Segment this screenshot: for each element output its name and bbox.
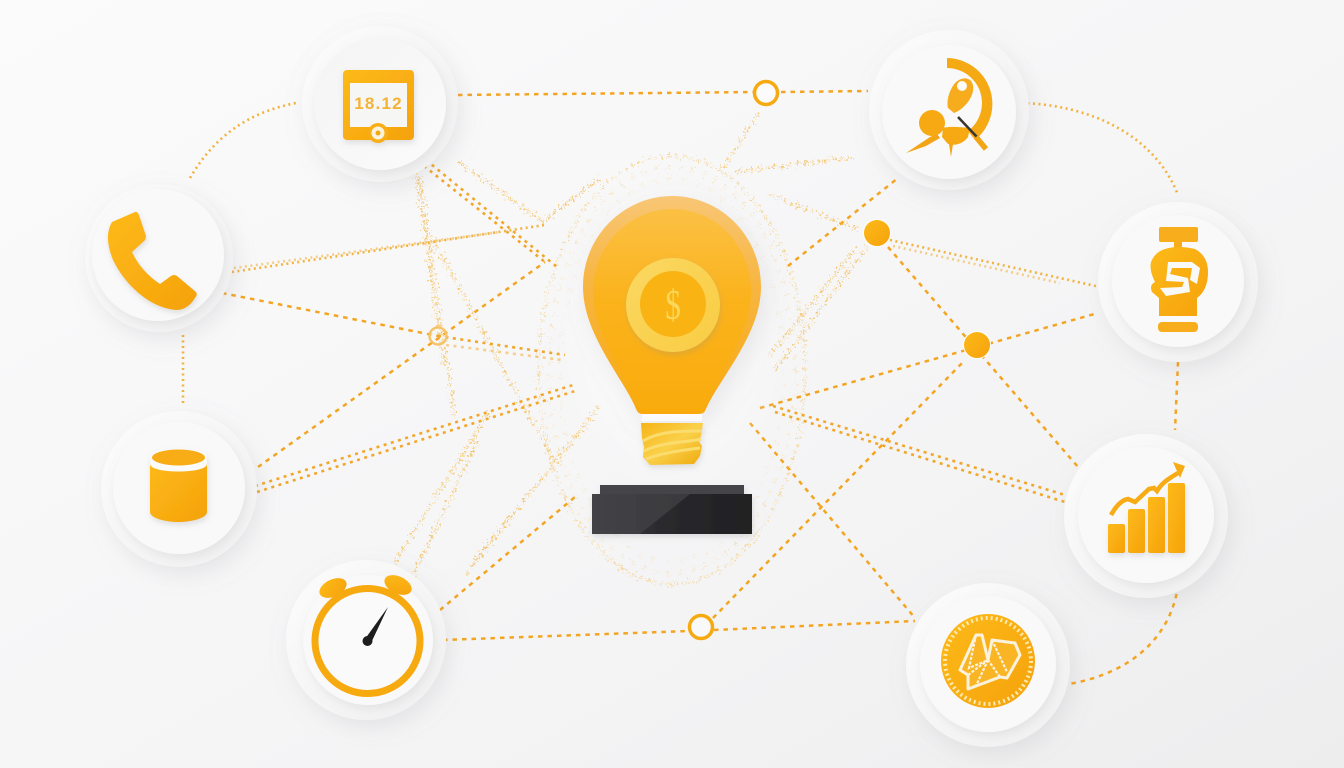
icon: cylinder: [101, 411, 257, 567]
central bulb: [557, 180, 787, 534]
icon: tablet: 18.12: [354, 94, 403, 113]
icon: phone: [85, 184, 233, 332]
pedestal: [592, 485, 752, 534]
icon: tablet: [302, 26, 458, 182]
faint dotted aura around bulb: [539, 156, 805, 584]
coin face: [640, 271, 706, 337]
faint dotted connection lines: [395, 110, 867, 578]
icon: bottle with S: [1098, 202, 1258, 362]
coin ring: [626, 258, 720, 352]
node: upper solid dot: [864, 220, 890, 246]
dotted double connection lines: [255, 160, 1065, 502]
collar: [642, 414, 702, 421]
connection lines: [222, 91, 1178, 685]
bulb glow: [557, 180, 787, 500]
clock hand: [365, 607, 388, 643]
icon: gold coin: [906, 583, 1070, 747]
bulb highlight: [593, 209, 751, 413]
node: lower ring: [690, 616, 712, 638]
bulb body: [583, 196, 761, 414]
dollar sign: $: [665, 283, 681, 329]
node: upper ring: [754, 82, 778, 104]
node: center solid dot: [964, 332, 990, 358]
screw base: [641, 423, 703, 465]
icon: alarm clock: [286, 560, 446, 720]
icon: bar chart: [1064, 434, 1228, 598]
icon: tools: [869, 30, 1029, 190]
node: left small ring: [430, 328, 446, 344]
dotted curved connection lines: [183, 103, 1178, 405]
